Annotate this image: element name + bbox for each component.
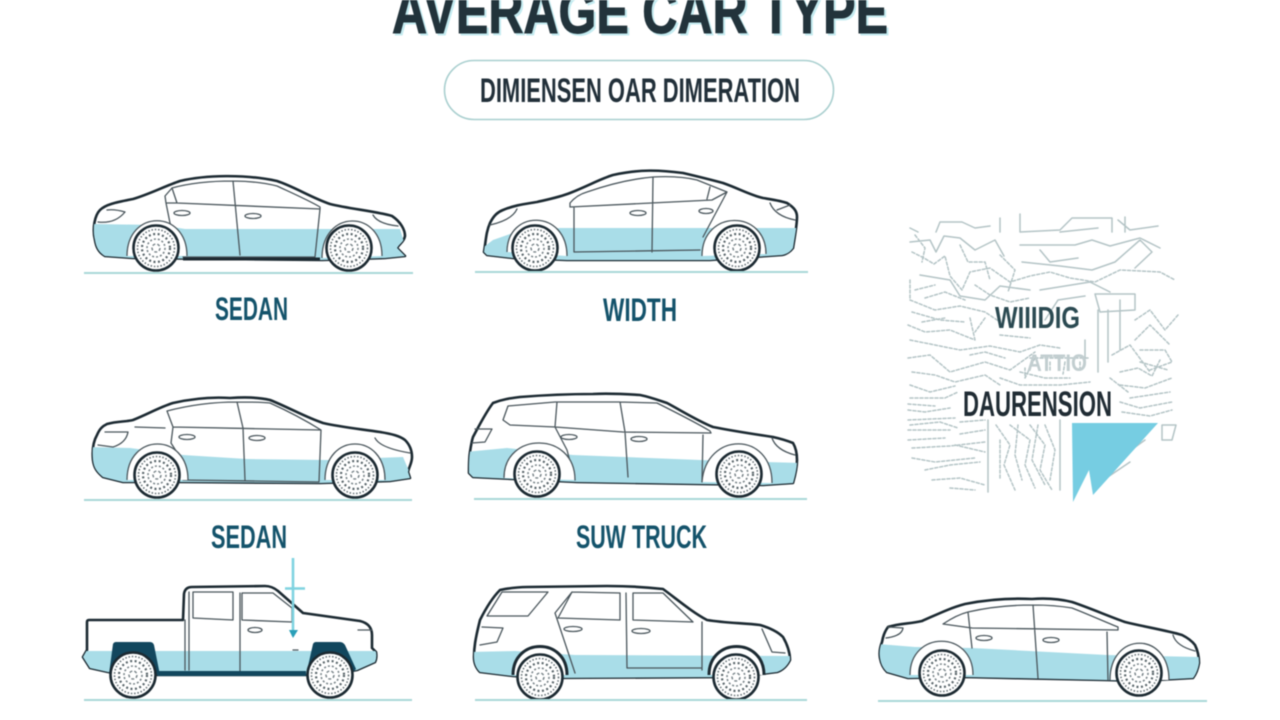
subtitle pill	[444, 60, 834, 120]
panel: dimension maze graphic	[908, 214, 1178, 502]
car: suv bottom centre	[470, 586, 807, 700]
label: sedan 2: SEDAN	[211, 519, 287, 555]
car: pickup truck bottom left	[80, 558, 412, 700]
maze faint word: ATTIO	[1027, 350, 1087, 377]
dark wheel arches	[109, 642, 356, 676]
label: sedan: SEDAN	[215, 291, 288, 327]
subtitle pill: DIMIENSEN OAR DIMERATION	[480, 72, 800, 110]
label: width: WIDTH	[603, 292, 677, 328]
car: coupe top centre	[475, 171, 808, 272]
car: sedan bottom right	[878, 599, 1207, 701]
blue triangle	[1072, 423, 1158, 502]
maze word: WIIIDIG	[995, 300, 1080, 335]
height arrow	[285, 558, 305, 638]
label: suw truck: SUW TRUCK	[576, 519, 707, 555]
dimension word: DAURENSION	[963, 385, 1112, 424]
car: sedan middle left	[84, 397, 415, 500]
car: sedan top left	[84, 176, 413, 273]
car: wagon middle centre	[465, 394, 807, 499]
maze line pattern	[908, 214, 1178, 492]
